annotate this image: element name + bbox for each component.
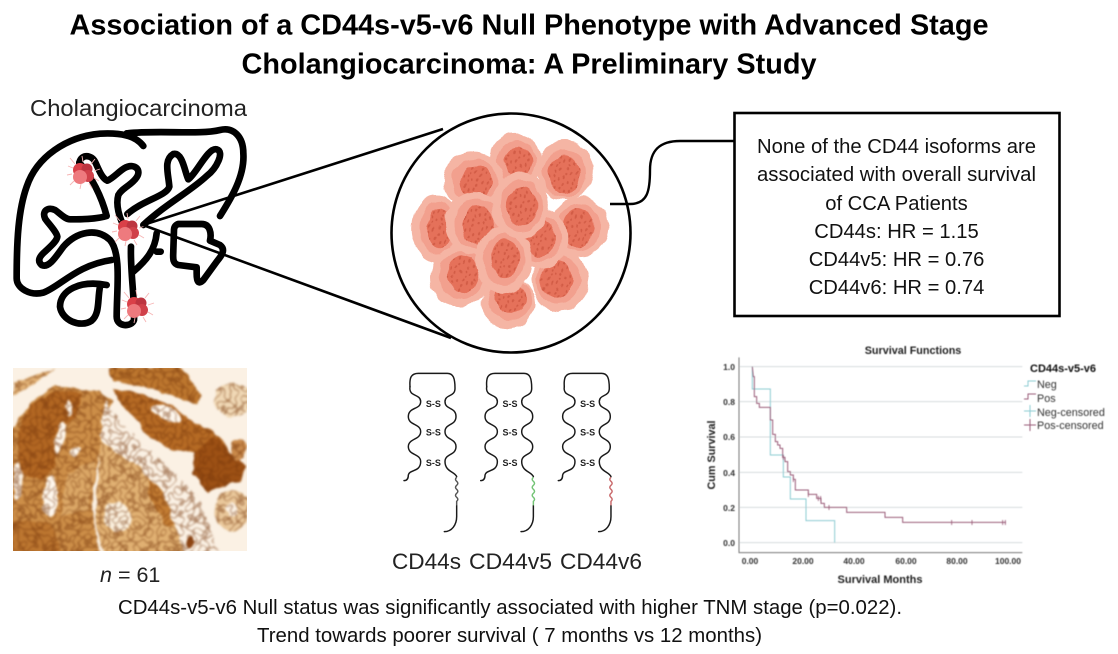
illustration: tumour cell cluster xyxy=(412,133,608,328)
chart legend: CD44s-v5-v6 xyxy=(1030,363,1096,375)
x axis labels: 40.00 xyxy=(843,556,865,566)
callout: overall survival hazard ratios: associated with overall survival xyxy=(757,164,1036,186)
diagram: CD44s isoform: S-S xyxy=(426,427,441,437)
callout: overall survival hazard ratios: of CCA Patients xyxy=(825,193,968,215)
chart legend: Pos-censored xyxy=(1037,420,1104,432)
diagram: CD44s isoform: S-S xyxy=(426,458,441,468)
y axis title: Cum Survival xyxy=(706,420,718,490)
isoform labels: CD44v6 xyxy=(560,549,642,574)
isoform labels xyxy=(392,549,642,574)
arrow: zoom leader lines xyxy=(143,129,451,338)
callout: overall survival hazard ratios: CD44s: HR = 1.15 xyxy=(814,221,979,243)
x axis labels: 0.00 xyxy=(742,556,759,566)
plot lines and axes xyxy=(739,357,1022,553)
diagram: CD44s isoform: S-S xyxy=(426,399,441,409)
conclusion text: CD44s-v5-v6 Null status was significantly associated with higher TNM stage (p=0.022). xyxy=(118,597,902,619)
chart legend: Neg-censored xyxy=(1037,407,1105,419)
caption: sample size: n = 61 xyxy=(100,563,160,587)
title: Cholangiocarcinoma: A Preliminary Study xyxy=(242,48,817,80)
diagram: CD44v5 isoform: S-S xyxy=(503,427,518,437)
x axis labels: 100.00 xyxy=(995,556,1021,566)
chart legend: Pos xyxy=(1037,393,1056,405)
y axis labels: 0.4 xyxy=(723,468,735,478)
x axis labels: 80.00 xyxy=(946,556,968,566)
diagram: CD44s isoform xyxy=(404,373,458,532)
conclusion text xyxy=(118,597,902,647)
magnified tumour circle xyxy=(392,114,630,352)
image: CD44 immunohistochemistry micrograph xyxy=(10,366,254,556)
heading: Cholangiocarcinoma: Cholangiocarcinoma xyxy=(30,95,248,121)
y axis labels: 0.2 xyxy=(723,503,735,513)
chart legend: Neg xyxy=(1037,379,1057,391)
title: Association of a CD44s-v5-v6 Null Phenotype with Advanced Stage xyxy=(70,10,988,42)
y axis labels xyxy=(723,362,735,548)
chart title: Survival Functions xyxy=(865,345,961,357)
x axis labels xyxy=(742,556,1021,566)
y axis labels: 0.6 xyxy=(723,432,735,442)
diagram: CD44v6 isoform xyxy=(558,373,612,532)
chart: Kaplan-Meier survival functions xyxy=(706,345,1105,586)
isoform labels: CD44v5 xyxy=(469,549,552,574)
callout: overall survival hazard ratios xyxy=(734,113,1060,316)
isoform labels: CD44s xyxy=(392,549,461,574)
x axis title: Survival Months xyxy=(838,574,922,586)
arrow: callout connector xyxy=(610,141,734,204)
diagram: CD44v5 isoform: S-S xyxy=(503,458,518,468)
diagram: CD44v6 isoform: S-S xyxy=(580,427,595,437)
icon: tumour sites on bile ducts xyxy=(67,156,154,323)
diagram: CD44v6 isoform: S-S xyxy=(580,399,595,409)
conclusion text: Trend towards poorer survival ( 7 months vs 12 months) xyxy=(257,625,762,647)
y axis labels: 0.0 xyxy=(723,538,735,548)
y axis labels: 0.8 xyxy=(723,397,735,407)
title xyxy=(70,10,988,80)
x axis labels: 20.00 xyxy=(792,556,814,566)
callout: overall survival hazard ratios: None of the CD44 isoforms are xyxy=(757,136,1036,158)
diagram: CD44v5 isoform xyxy=(481,373,535,532)
diagram: CD44v6 isoform: S-S xyxy=(580,458,595,468)
y axis labels: 1.0 xyxy=(723,362,735,372)
x axis labels: 60.00 xyxy=(895,556,917,566)
icon: liver with bile ducts xyxy=(17,129,243,325)
diagram: CD44v5 isoform: S-S xyxy=(503,399,518,409)
chart legend xyxy=(1024,363,1105,432)
callout: overall survival hazard ratios: CD44v5: HR = 0.76 xyxy=(809,249,984,271)
callout: overall survival hazard ratios: CD44v6: HR = 0.74 xyxy=(809,277,984,299)
